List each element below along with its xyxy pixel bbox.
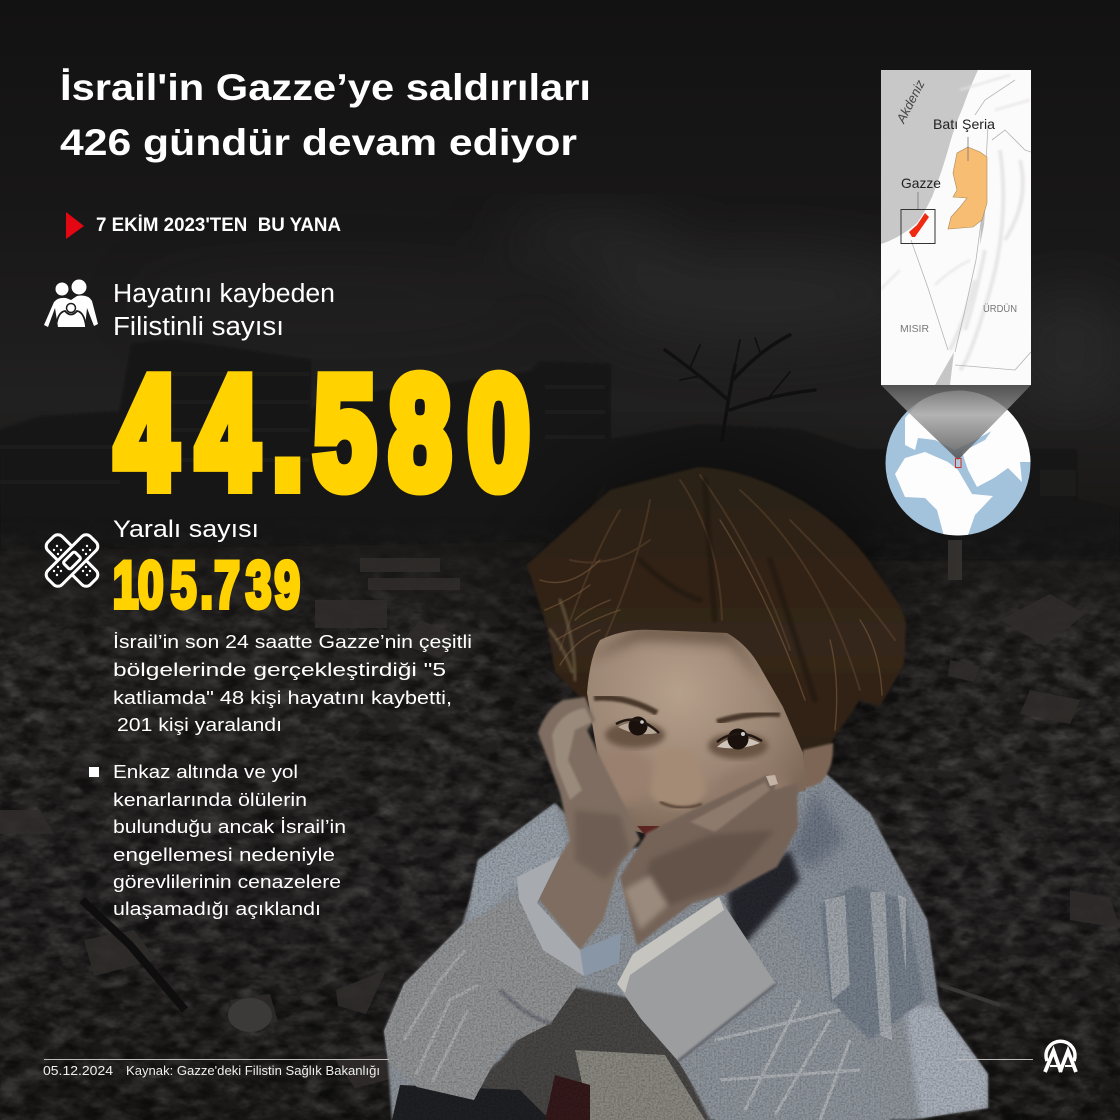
rubble texture [0, 558, 1120, 1120]
source line: 05.12.2024 [43, 1064, 113, 1078]
text block: last 24 hours: İsrail’in son 24 saatte Gazze’nin çeşitli [113, 631, 472, 652]
number: wounded: 105.739 [113, 548, 300, 623]
text block: last 24 hours: bölgelerinde gerçekleştirdiği "5 [113, 659, 446, 680]
Gaza locator box [901, 210, 935, 244]
text block: rubble note: engellemesi nedeniyle [113, 844, 335, 865]
map labels: MISIR [900, 324, 929, 335]
text block: rubble note [89, 761, 346, 919]
map labels: Akdeniz [893, 77, 928, 126]
dark chest [480, 986, 710, 1120]
soft halo [515, 450, 915, 830]
text block: last 24 hours: katliamda" 48 kişi hayatını kaybetti, [113, 687, 452, 708]
text block: last 24 hours: 201 kişi yaralandı [117, 714, 282, 735]
face [587, 630, 806, 840]
map labels: Gazze [901, 175, 941, 191]
Gaza strip [909, 213, 929, 237]
child photo illustration [380, 450, 1000, 1120]
right hand and forearm [620, 775, 798, 946]
text block: rubble note: ulaşamadığı açıklandı [113, 898, 321, 919]
source line: Kaynak: Gazze'deki Filistin Sağlık Bakanlığı [126, 1064, 380, 1078]
Gulf of Aqaba [935, 352, 954, 385]
West Bank [948, 147, 987, 229]
subheading: date [66, 212, 341, 239]
left hand [537, 697, 640, 950]
ear [800, 743, 833, 788]
Eurasia [962, 410, 1030, 487]
ruined buildings [0, 340, 1120, 560]
Europe [905, 390, 1010, 450]
map panel [880, 70, 1031, 385]
left sleeve [384, 910, 576, 1100]
map labels: ÜRDÜN [983, 303, 1017, 315]
sleeve stripe [820, 885, 925, 1040]
text block: last 24 hours [113, 631, 472, 735]
icon: bandage [44, 532, 100, 589]
bullet [89, 767, 99, 777]
sea [881, 70, 978, 244]
label: wounded: Yaralı sayısı [113, 516, 259, 543]
brows [594, 698, 657, 713]
nose [651, 776, 704, 809]
sweater [380, 770, 1000, 1120]
dark collar gap [727, 850, 800, 955]
bare tree [665, 335, 815, 440]
subheading: date: 7 EKİM 2023'TEN BU YANA [96, 215, 341, 236]
text block: rubble note: kenarlarında ölülerin [113, 789, 307, 810]
title [60, 67, 591, 163]
zoom cone [881, 385, 1031, 460]
right sleeve lower [678, 1060, 890, 1120]
text block: rubble note: Enkaz altında ve yol [113, 761, 298, 782]
text block: rubble note: bulunduğu ancak İsrail’in [113, 816, 346, 837]
title: 426 gündür devam ediyor [60, 122, 577, 163]
Africa [895, 452, 993, 540]
title: İsrail'in Gazze’ye saldırıları [60, 67, 591, 108]
eye sockets [605, 722, 665, 748]
label: deaths [113, 280, 335, 341]
eyes [616, 716, 762, 750]
smoke clouds [130, 214, 1120, 410]
debris [0, 558, 1120, 1088]
icon: family [44, 280, 98, 327]
label: deaths: Filistinli sayısı [113, 313, 284, 341]
text block: rubble note: görevlilerinin cenazelere [113, 871, 341, 892]
label: deaths: Hayatını kaybeden [113, 280, 335, 308]
borders [911, 80, 1031, 370]
location marker [956, 458, 961, 468]
lips [637, 826, 660, 838]
map labels [893, 77, 1017, 335]
number: deaths: 44.580 [115, 344, 529, 521]
map labels: Batı Şeria [933, 116, 995, 132]
sweater grain [380, 770, 1000, 1120]
terrain [880, 75, 1030, 370]
Dead Sea [980, 210, 986, 244]
globe locator [881, 385, 1035, 540]
sweater cuffs [517, 856, 776, 1061]
icon: red triangle [66, 212, 84, 239]
logo: AA [1045, 1041, 1076, 1072]
hair [527, 467, 906, 765]
fingernail [766, 775, 778, 786]
footer [43, 1041, 1076, 1078]
